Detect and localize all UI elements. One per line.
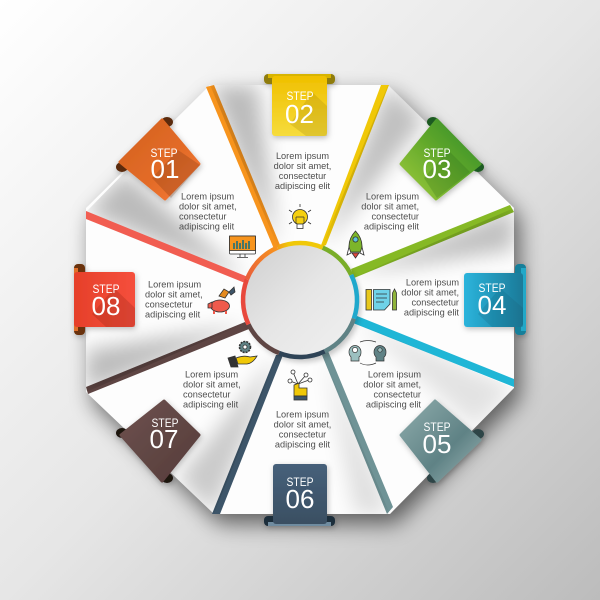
tag: step 02 [264,74,335,136]
tag: step 05: STEP [424,422,451,434]
panel: step 05 [322,319,514,514]
panel: step 06 [212,352,390,526]
panel: step 03 [322,85,514,278]
tag: step 08: 08 [92,291,120,321]
center ring [243,243,357,357]
icon: rocket [347,231,364,258]
text: step 07: Lorem ipsum [185,370,238,380]
panel: step 08 [74,211,248,392]
icon: network hand [288,370,312,400]
text: step 06: consectetur [279,430,326,440]
panel: step 02 [210,74,389,248]
tag: step 03 [401,117,484,199]
icon: gear and hand [228,342,257,367]
tag: step 07: STEP [152,418,179,430]
tag: step 04: 04 [478,290,506,320]
tag: step 08 [74,264,135,335]
text: step 01: Lorem ipsum [181,192,234,202]
text: step 04: dolor sit amet, [401,288,459,298]
tag: step 02: STEP [286,91,314,103]
text: step 07: dolor sit amet, [183,380,241,390]
panel: step 04 [352,208,526,387]
icon: light bulb [289,204,311,228]
text: step 08: adipiscing elit [145,310,201,320]
text: step 08: consectetur [145,300,192,310]
icon: piggy bank [208,287,235,314]
text: step 04: consectetur [412,298,459,308]
center circle shadow [245,246,361,362]
text: step 01: adipiscing elit [179,222,235,232]
text: step 02: Lorem ipsum [276,151,329,161]
text: step 07: adipiscing elit [183,400,239,410]
icon: monitor chart [230,236,256,258]
tag: step 02: 02 [285,99,314,129]
panel: step 07 [86,322,279,514]
tag: step 04: STEP [478,283,506,295]
text: step 03: adipiscing elit [364,222,419,232]
tag: step 08: STEP [92,284,120,296]
tag: step 07: 07 [150,424,178,454]
tag: step 05: 05 [423,429,451,459]
tag: step 07 [116,401,199,483]
text: step 05: dolor sit amet, [363,380,421,390]
text: step 02: adipiscing elit [275,181,331,191]
icon: two heads [349,340,386,365]
tag: step 03: STEP [424,148,451,160]
text: step 04: Lorem ipsum [406,278,459,288]
text: step 05: consectetur [374,390,421,400]
text: step 07: consectetur [183,390,230,400]
tag: step 06: STEP [286,477,314,489]
tag: step 05 [401,401,484,483]
text: step 02: dolor sit amet, [274,161,331,171]
tag: step 01 [116,117,200,199]
text: step 06: adipiscing elit [275,440,331,450]
tag: step 01: 01 [151,154,179,184]
tag: step 06: 06 [286,484,314,514]
text: step 01: consectetur [179,212,226,222]
tag: step 06 [264,464,335,526]
tag: step 01: STEP [150,148,178,160]
panel: step 01 [86,85,280,280]
text: step 03: Lorem ipsum [366,192,419,202]
text: step 08: dolor sit amet, [145,290,203,300]
text: step 04: adipiscing elit [404,308,459,318]
text: step 05: Lorem ipsum [368,370,421,380]
tag: step 04 [464,264,526,335]
icon: notes and ruler [366,289,396,310]
octagon base [86,85,514,514]
text: step 03: dolor sit amet, [361,202,419,212]
text: step 08: Lorem ipsum [148,280,201,290]
octagon drop shadow [92,95,520,524]
text: step 01: dolor sit amet, [179,202,237,212]
text: step 06: Lorem ipsum [276,410,329,420]
text: step 02: consectetur [279,171,326,181]
text: step 05: adipiscing elit [366,400,421,410]
tag: step 03: 03 [423,154,451,184]
text: step 03: consectetur [372,212,419,222]
center circle [245,245,355,355]
text: step 06: dolor sit amet, [274,420,331,430]
